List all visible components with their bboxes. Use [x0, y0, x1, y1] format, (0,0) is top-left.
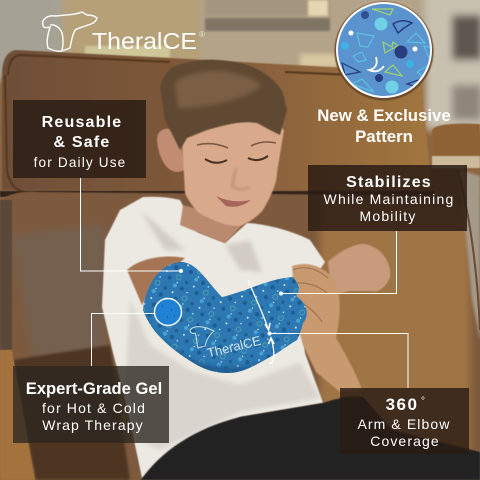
callout: stabilizes: Mobility [359, 208, 417, 224]
callout: 360 coverage: ° [421, 396, 425, 407]
sofa back [2, 50, 432, 190]
callout: expert-grade gel: Expert-Grade Gel [26, 379, 162, 398]
brand logo [43, 12, 205, 54]
callout: 360 coverage: 360 [386, 395, 418, 414]
callout: stabilizes: Stabilizes [346, 174, 432, 191]
callout: stabilizes: While Maintaining [324, 191, 454, 207]
callout: expert-grade gel: Wrap Therapy [42, 417, 144, 433]
connector dots [179, 269, 283, 336]
callout: expert-grade gel: for Hot & Cold [42, 400, 146, 416]
arm sleeve product [140, 262, 307, 373]
sofa seat cushion [0, 192, 480, 480]
pattern caption [317, 106, 451, 146]
callout: reusable and safe: for Daily Use [34, 155, 126, 170]
arrows: 360 degree coverage [248, 280, 274, 363]
sleeve logo [190, 327, 263, 361]
callout: reusable and safe [13, 100, 146, 178]
callout: 360 coverage [340, 388, 469, 454]
callout: 360 coverage: Arm & Elbow [357, 416, 451, 432]
upper arm skin [127, 256, 185, 305]
boy: body and t-shirt [102, 197, 480, 480]
gel pack callout circle [154, 298, 182, 326]
callout: 360 coverage: Coverage [370, 433, 440, 449]
mouth [216, 196, 251, 207]
connector lines [80, 178, 408, 388]
right sofa arm [432, 124, 480, 160]
sleeve logo: TheralCE [205, 333, 263, 361]
callout: expert-grade gel [13, 366, 169, 443]
callout: stabilizes [308, 165, 467, 231]
black shorts [141, 397, 480, 480]
registered mark: ® [199, 30, 205, 39]
callout: reusable and safe: Reusable [42, 114, 122, 131]
pattern caption: Pattern [355, 127, 413, 146]
boy: head, face and hair [157, 60, 287, 243]
icon: polar bear [43, 12, 97, 51]
callout: reusable and safe: & Safe [54, 134, 110, 151]
pattern caption: New & Exclusive [317, 106, 451, 125]
wordmark: TheralCE [92, 28, 197, 54]
pattern swatch [334, 2, 434, 100]
eyes [205, 156, 268, 163]
arms and hands [292, 244, 390, 392]
